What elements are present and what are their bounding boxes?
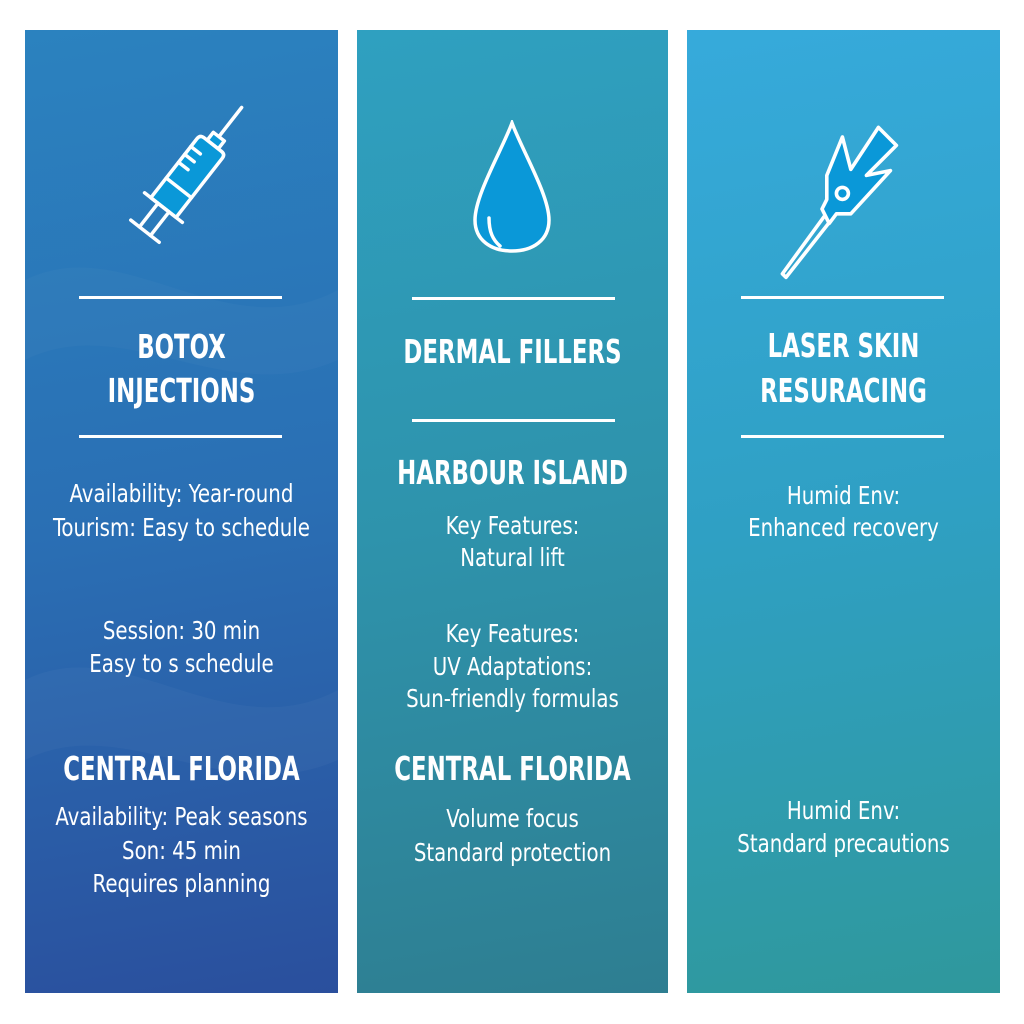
- panel: dermal fillers: [357, 30, 668, 993]
- panel: botox: Easy to s schedule: [89, 649, 274, 678]
- panel: dermal fillers: Key Features:: [446, 619, 579, 648]
- heading: botox injections: BOTOX: [137, 327, 226, 366]
- panel: dermal fillers: Volume focus: [446, 804, 579, 833]
- icon: laser: [780, 126, 898, 280]
- panel: dermal fillers: Standard protection: [414, 838, 611, 867]
- panel: laser: Enhanced recovery: [748, 513, 939, 542]
- panel: botox: INJECTIONS: [108, 371, 255, 410]
- icon: drop: [473, 120, 551, 253]
- text: central florida details: Availability: Peak seasons: [55, 802, 308, 831]
- panel: dermal fillers: Natural lift: [460, 543, 565, 572]
- panel: botox: Tourism: Easy to schedule: [53, 513, 310, 542]
- panel: dermal fillers: Sun-friendly formulas: [406, 684, 619, 713]
- text: session: Session: 30 min: [103, 616, 260, 645]
- heading: central florida: CENTRAL FLORIDA: [394, 749, 631, 788]
- heading: dermal fillers: DERMAL FILLERS: [403, 332, 622, 371]
- panel: laser: [687, 30, 1000, 993]
- heading: harbour island: HARBOUR ISLAND: [397, 453, 628, 492]
- panel: dermal fillers: UV Adaptations:: [433, 652, 592, 681]
- text: availability: Availability: Year-round: [70, 479, 293, 508]
- divider top: [79, 296, 282, 299]
- text: humid env 2: Humid Env:: [787, 796, 900, 825]
- panel: botox: Son: 45 min: [122, 836, 241, 865]
- panel: botox: Requires planning: [93, 869, 270, 898]
- panel: botox: [25, 30, 338, 993]
- heading: central florida: CENTRAL FLORIDA: [63, 749, 300, 788]
- icon: syringe: [128, 106, 244, 244]
- text: humid env 1: Humid Env:: [787, 481, 900, 510]
- text: features: Key Features:: [446, 511, 579, 540]
- heading: laser skin resurfacing: LASER SKIN: [768, 326, 919, 365]
- panel: laser: Standard precautions: [737, 829, 950, 858]
- panel: laser: RESURACING: [760, 371, 927, 410]
